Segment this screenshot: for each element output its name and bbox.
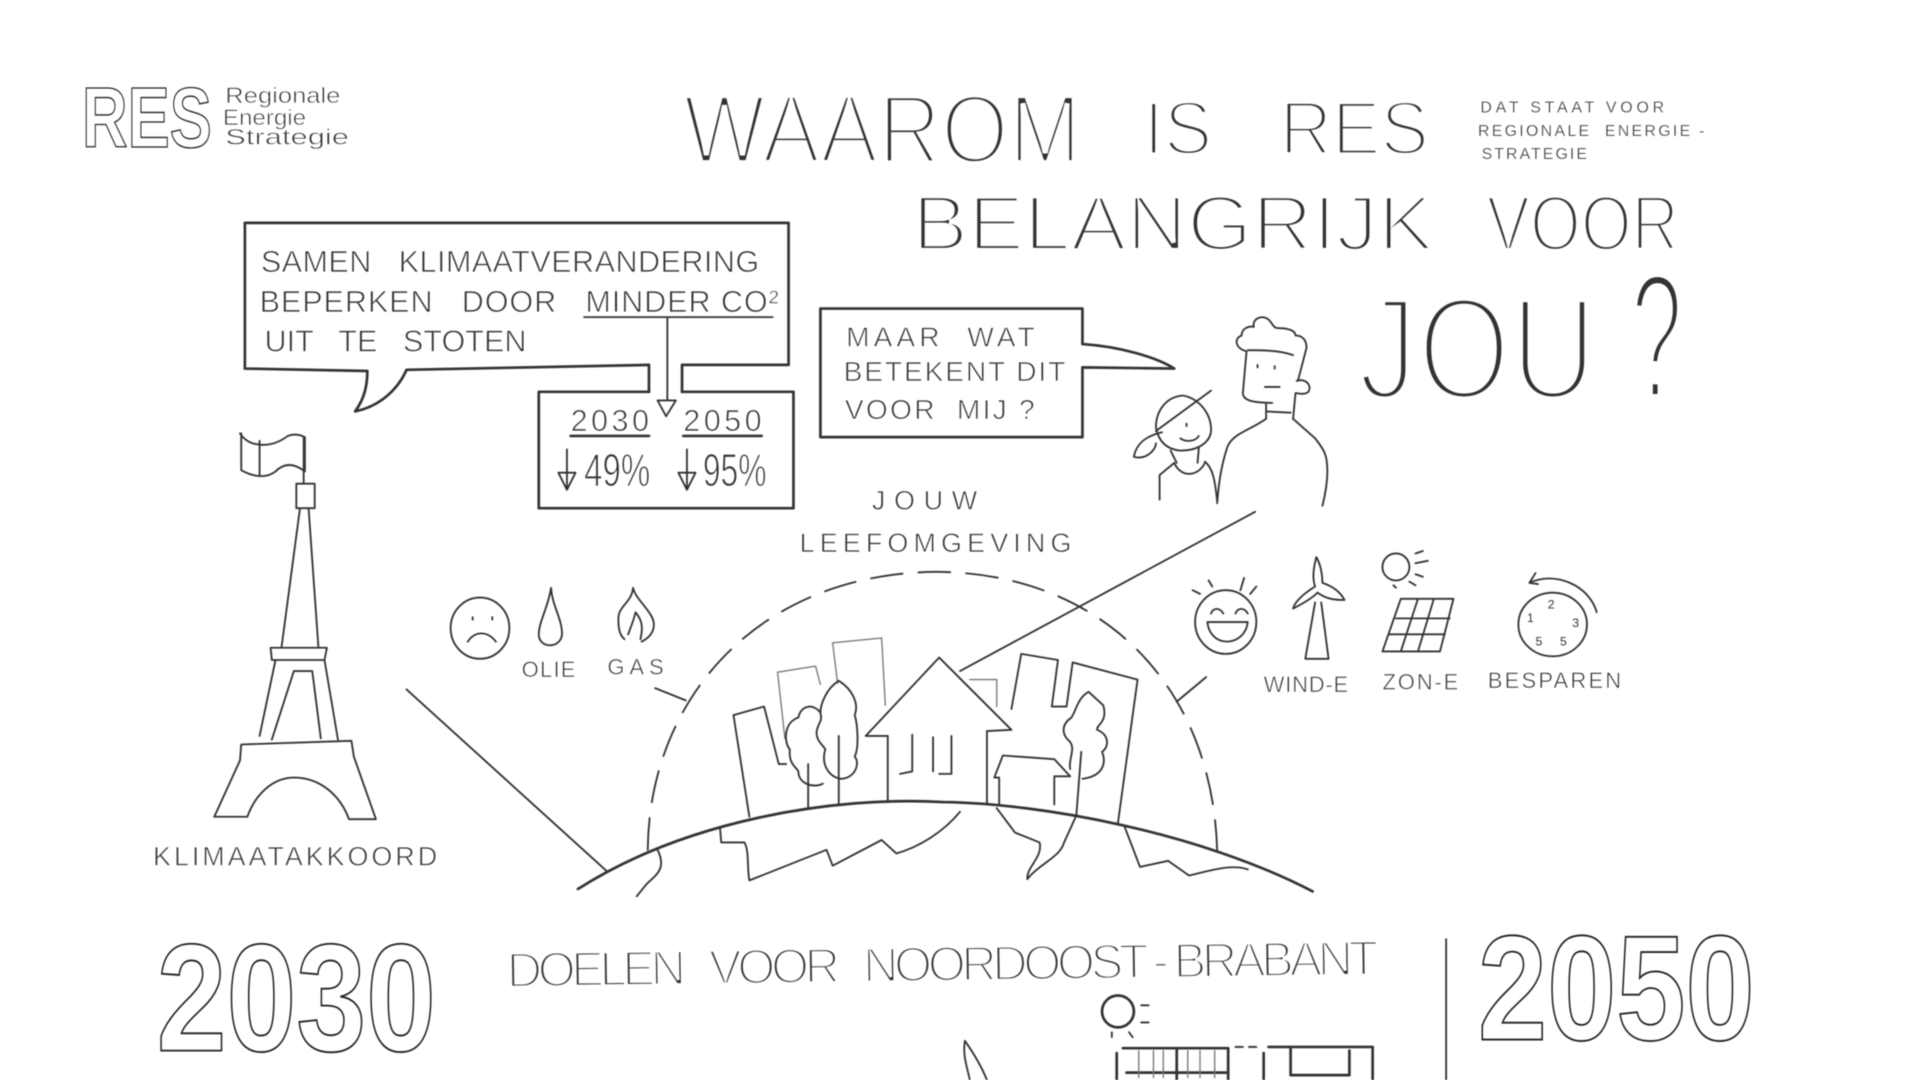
icons: sad face, oil, gas (451, 588, 664, 682)
divider line (1445, 939, 1447, 1080)
note: dat staat voor regionale energie-strategie: STRATEGIE (1482, 146, 1587, 163)
box: 2030 and 2050 reduction targets (539, 392, 793, 508)
icons: sad face, oil, gas: GAS (607, 655, 664, 680)
icons: happy face, wind turbine, solar panel, clock: 5 (1560, 634, 1567, 648)
speech bubble: maar wat betekent dit voor mij: BETEKENT DIT (844, 356, 1065, 387)
label: jouw leefomgeving: LEEFOMGEVING (800, 528, 1071, 558)
box: 2030 and 2050 reduction targets: 2050 (683, 404, 762, 438)
icons: happy face, wind turbine, solar panel, clock: BESPAREN (1488, 668, 1621, 693)
illustration: globe horizon with continents (578, 801, 1313, 896)
icons: happy face, wind turbine, solar panel, clock: 2 (1548, 598, 1555, 612)
title: Waarom is RES belangrijk voor jou?: VOOR (1487, 179, 1679, 267)
icons: sad face, oil, gas: OLIE (522, 657, 576, 682)
big year: 2050: 2050 (1478, 905, 1755, 1072)
speech bubble: samen klimaatverandering beperken: SAMEN KLIMAATVERANDERING (261, 245, 759, 279)
note: dat staat voor regionale energie-strategie: REGIONALE ENERGIE - (1478, 123, 1704, 140)
logo: RES Regionale Energie Strategie: RES (82, 70, 212, 166)
big year: 2030: 2030 (157, 913, 436, 1080)
speech bubble: maar wat betekent dit voor mij (820, 309, 1174, 437)
box: 2030 and 2050 reduction targets: 2030 (571, 404, 649, 438)
title: Waarom is RES belangrijk voor jou?: WAAROM (683, 74, 1081, 184)
heading: doelen voor Noordoost-Brabant: DOELEN VOOR NOORDOOST - BRABANT (506, 932, 1379, 998)
logo: RES Regionale Energie Strategie: Energie (223, 105, 306, 130)
title: Waarom is RES belangrijk voor jou?: JOU (1358, 267, 1597, 431)
box: 2030 and 2050 reduction targets: 95% (703, 444, 767, 496)
title: Waarom is RES belangrijk voor jou?: BELANGRIJK (912, 179, 1434, 267)
note: dat staat voor regionale energie-strategie: DAT STAAT VOOR (1480, 100, 1664, 117)
title: Waarom is RES belangrijk voor jou?: IS (1144, 86, 1212, 171)
logo: RES Regionale Energie Strategie (82, 70, 349, 166)
speech bubble: samen klimaatverandering beperken: UIT TE STOTEN (264, 324, 527, 358)
dashed dome (648, 572, 1217, 850)
title: Waarom is RES belangrijk voor jou?: ? (1631, 236, 1682, 436)
icons: happy face, wind turbine, solar panel, clock: 3 (1572, 616, 1579, 630)
illustration: city with house and trees (733, 638, 1138, 823)
label: jouw leefomgeving: JOUW (872, 485, 978, 515)
icons: happy face, wind turbine, solar panel, clock: 1 (1527, 611, 1534, 625)
speech bubble: samen klimaatverandering beperken: BEPERKEN DOOR MINDER CO² (260, 285, 779, 319)
label: jouw leefomgeving (800, 485, 1071, 558)
speech bubble: maar wat betekent dit voor mij: MAAR WAT (846, 322, 1035, 353)
icons: happy face, wind turbine, solar panel, clock: 5 (1536, 634, 1543, 648)
logo: RES Regionale Energie Strategie: Regionale (225, 83, 340, 108)
icons: happy face, wind turbine, solar panel, clock: ZON-E (1382, 669, 1458, 694)
connector lines (407, 512, 1255, 871)
box: 2030 and 2050 reduction targets: 49% (584, 444, 650, 496)
logo: RES Regionale Energie Strategie: Strategie (225, 124, 349, 149)
speech bubble: maar wat betekent dit voor mij: VOOR MIJ ? (845, 394, 1035, 425)
title: Waarom is RES belangrijk voor jou? (683, 74, 1682, 436)
cropped illustration: wind turbine blade, sun and solar house (964, 996, 1373, 1080)
icon: Eiffel tower with flag (214, 433, 376, 819)
people: man and child (1134, 317, 1327, 506)
label: klimaatakkoord: KLIMAATAKKOORD (153, 842, 437, 872)
icons: happy face, wind turbine, solar panel, clock: WIND-E (1264, 672, 1348, 697)
speech bubble: samen klimaatverandering beperken (245, 223, 789, 416)
icons: happy face, wind turbine, solar panel, clock (1193, 551, 1621, 697)
title: Waarom is RES belangrijk voor jou?: RES (1280, 86, 1429, 171)
note: dat staat voor regionale energie-strategie (1478, 100, 1704, 163)
